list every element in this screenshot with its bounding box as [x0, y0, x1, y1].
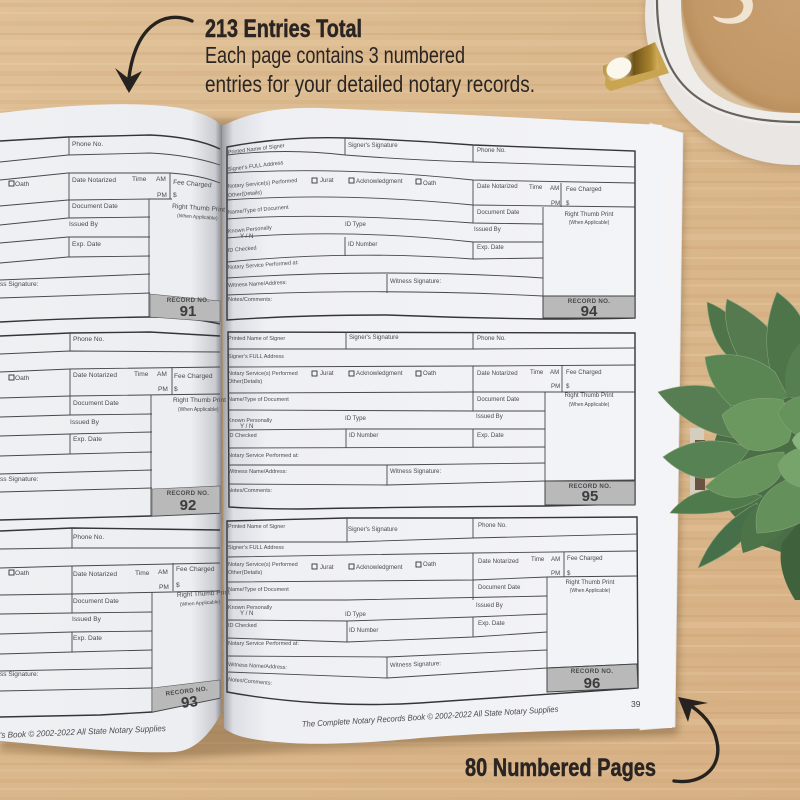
form: record 95: [228, 332, 635, 509]
form: record 93: $: [176, 582, 180, 589]
form: record 93: Right Thumb Print: [177, 589, 230, 599]
record number box 94: [543, 296, 635, 320]
form: record 96: Printed Name of Signer: [228, 524, 285, 530]
form: record 94: [227, 138, 635, 320]
form: record 92: Document Date: [73, 400, 119, 407]
form: record 94: Y / N: [240, 233, 253, 240]
form: record 96: Time: [531, 556, 545, 563]
form: record 92: Issued By: [70, 419, 100, 426]
form: record 93: Time: [135, 570, 150, 577]
form: record 95: Exp. Date: [477, 432, 504, 439]
form: record 94: Signer's FULL Address: [228, 160, 284, 173]
form: record 96: Witness Signature:: [390, 660, 441, 669]
form: record 95: ID Checked: [228, 433, 257, 439]
form: record 93: Phone No.: [73, 534, 104, 541]
form: record 92: PM: [158, 386, 168, 393]
form: record 95: Notary Service Performed at:: [228, 453, 299, 459]
form: record 95: Right Thumb Print: [564, 392, 614, 399]
form: record 94: Notary Service(s) Performed: [228, 178, 298, 190]
form: record 91: ss Signature:: [0, 281, 39, 288]
form: record 96: Notary Service Performed at:: [228, 641, 299, 647]
form: record 96: Other(Details): [228, 570, 262, 576]
form: record 91: PM: [157, 192, 167, 199]
record number box 94: 94: [581, 303, 598, 320]
record number box 96: [547, 664, 638, 692]
form: record 96: Exp. Date: [478, 620, 505, 627]
form: record 93: Oath: [15, 570, 30, 577]
form: record 94: Name/Type of Document: [228, 205, 289, 216]
text: entries description: [205, 42, 535, 97]
form: record 96: [227, 517, 638, 704]
form: record 91: Oath: [15, 181, 30, 188]
coffee cream swirl: [713, 0, 753, 24]
form: record 96: Notary Service(s) Performed: [228, 562, 298, 568]
form: record 91: Phone No.: [72, 141, 103, 148]
form: record 95: Known Personally: [228, 418, 272, 424]
succulent plant: [658, 292, 800, 600]
form: record 91: Exp. Date: [72, 241, 101, 248]
form: record 94: PM: [551, 200, 560, 207]
form: record 95: Phone No.: [477, 335, 506, 342]
form: record 94: ID Checked: [228, 246, 257, 254]
record number box 95: 95: [582, 488, 598, 505]
form: record 94: Witness Signature:: [390, 278, 441, 285]
form: record 91: Document Date: [72, 203, 118, 210]
right page: [222, 108, 672, 744]
form: record 92: Time: [134, 371, 149, 378]
left page footer: 's Book © 2002-2022 All State Notary Supplies: [0, 723, 167, 740]
arrow: pointing down to left page: [115, 17, 192, 93]
right page footer: The Complete Notary Records Book © 2002-2022 All State Notary Supplies: [302, 704, 559, 729]
form: record 94: Exp. Date: [477, 244, 504, 251]
text: entries description: entries for your detailed notary records.: [205, 71, 535, 97]
heading: 80 numbered pages: 80 Numbered Pages: [465, 754, 656, 782]
form: record 96: ID Type: [345, 611, 366, 618]
form: record 93: ss Signature:: [0, 671, 39, 678]
form: record 96: ID Checked: [228, 623, 257, 629]
form: record 94: Notes/Comments:: [228, 297, 272, 303]
record number box 91: RECORD NO.: [167, 297, 209, 304]
record number box 91: [150, 294, 220, 322]
plant pot: [690, 428, 705, 503]
form: record 94: Time: [529, 184, 543, 191]
form: record 91: $: [173, 192, 177, 199]
under page stack: [640, 123, 683, 730]
form: record 92: [0, 332, 226, 520]
form: record 95: Jurat: [320, 370, 334, 377]
form: record 95: Witness Name/Address:: [228, 469, 287, 475]
form: record 94: Date Notarized: [477, 183, 518, 190]
form: record 95: Y / N: [240, 423, 253, 430]
form: record 95: Time: [530, 369, 544, 376]
form: record 95: Printed Name of Signer: [228, 336, 285, 342]
form: record 92: ss Signature:: [0, 476, 39, 483]
form: record 91: Time: [132, 176, 147, 183]
record number box 96: 96: [584, 675, 600, 692]
left page: [0, 104, 222, 752]
form: record 96: Y / N: [240, 610, 253, 617]
form: record 95: (When Applicable): [569, 402, 610, 408]
form: record 95: Document Date: [477, 396, 520, 403]
form: record 92: $: [174, 386, 178, 393]
form: record 94: Notary Service Performed at:: [228, 260, 299, 271]
record number box 92: RECORD NO.: [167, 490, 209, 497]
page number: 39: [631, 699, 641, 709]
form: record 95: AM: [550, 369, 559, 376]
page stack shadow: [0, 115, 684, 760]
record number box 96: RECORD NO.: [571, 668, 613, 675]
form: record 92: AM: [157, 371, 167, 378]
form: record 95: ID Number: [349, 432, 378, 439]
form: record 96: Known Personally: [228, 605, 272, 611]
form: record 95: Fee Charged: [566, 369, 602, 376]
form: record 93: Date Notarized: [73, 571, 117, 578]
form: record 94: AM: [550, 185, 559, 192]
form: record 91: Date Notarized: [72, 177, 116, 184]
form: record 93: (When Applicable): [180, 599, 221, 608]
form: record 94: Witness Name/Address:: [228, 280, 287, 289]
form: record 95: $: [566, 383, 570, 390]
saucer and coffee cup: [645, 0, 800, 168]
form: record 91: Fee Charged: [173, 179, 212, 189]
form: record 96: Signer's FULL Address: [228, 545, 284, 551]
form: record 95: Acknowledgment: [356, 370, 403, 377]
form: record 95: Oath: [423, 370, 436, 377]
form: record 93: Fee Charged: [176, 566, 215, 573]
form: record 96: (When Applicable): [570, 588, 611, 594]
form: record 94: Known Personally: [228, 225, 272, 235]
form: record 96: Document Date: [478, 584, 521, 591]
form: record 95: Witness Signature:: [390, 468, 441, 475]
form: record 96: PM: [551, 570, 560, 577]
form: record 92: Exp. Date: [73, 436, 102, 443]
form: record 96: Signer's Signature: [348, 526, 398, 533]
form: record 91: [0, 135, 225, 324]
record number box 93: 93: [180, 693, 199, 712]
form: record 96: Fee Charged: [567, 555, 603, 562]
arrow: pointing up to page number: [674, 697, 718, 782]
record number box 93: [152, 680, 220, 712]
form: record 94: (When Applicable): [569, 220, 610, 226]
form: record 91: Right Thumb Print: [172, 203, 225, 214]
form: record 95: Notary Service(s) Performed: [228, 371, 298, 377]
heading: 213 entries total: 213 Entries Total: [205, 15, 362, 43]
form: record 94: Document Date: [477, 209, 520, 216]
form: record 92: Right Thumb Print: [173, 397, 226, 404]
form: record 95: ID Type: [345, 415, 366, 422]
form: record 95: Signer's Signature: [349, 334, 399, 341]
form: record 94: Acknowledgment: [356, 178, 403, 185]
text: entries description: Each page contains 3 numbered: [205, 42, 465, 68]
form: record 96: Acknowledgment: [356, 564, 403, 571]
form: record 93: PM: [159, 584, 169, 591]
form: record 92: (When Applicable): [178, 407, 219, 413]
form: record 93: Document Date: [73, 598, 119, 605]
form: record 94: Oath: [423, 180, 436, 187]
form: record 94: Signer's Signature: [348, 142, 398, 149]
form: record 93: Issued By: [72, 616, 102, 623]
form: record 92: Phone No.: [73, 336, 104, 343]
form: record 94: ID Number: [348, 241, 377, 248]
icon: gold cup handle: [603, 42, 669, 91]
form: record 95: Signer's FULL Address: [228, 354, 284, 360]
form: record 96: Oath: [423, 561, 436, 568]
form: record 93: [0, 528, 230, 717]
form: record 93: AM: [158, 569, 168, 576]
form: record 96: Phone No.: [478, 522, 507, 529]
record number box 95: RECORD NO.: [569, 483, 611, 490]
form: record 95: Other(Details): [228, 379, 262, 385]
form: record 96: AM: [551, 556, 560, 563]
form: record 95: Name/Type of Document: [228, 397, 289, 403]
form: record 93: Exp. Date: [73, 635, 102, 642]
form: record 91: AM: [156, 176, 166, 183]
form: record 94: ID Type: [345, 221, 366, 228]
form: record 96: Name/Type of Document: [228, 587, 289, 593]
record number box 91: 91: [180, 303, 196, 320]
form: record 95: Issued By: [476, 413, 504, 420]
form: record 95: Date Notarized: [477, 370, 518, 377]
form: record 94: Phone No.: [477, 147, 506, 154]
form: record 91: Issued By: [69, 221, 99, 228]
form: record 96: Right Thumb Print: [566, 579, 615, 586]
form: record 94: Jurat: [320, 177, 334, 184]
form: record 96: Jurat: [320, 564, 334, 571]
form: record 95: PM: [551, 383, 560, 390]
record number box 95: [545, 481, 635, 505]
form: record 92: Date Notarized: [73, 372, 117, 379]
form: record 94: Printed Name of Signer: [228, 143, 285, 156]
form: record 94: Issued By: [474, 226, 502, 233]
form: record 94: Right Thumb Print: [564, 211, 614, 218]
form: record 96: Date Notarized: [478, 558, 519, 565]
form: record 92: Fee Charged: [174, 373, 213, 380]
form: record 96: Notes/Comments:: [228, 677, 273, 687]
record number box 94: RECORD NO.: [568, 298, 610, 305]
form: record 94: Other(Details): [228, 190, 262, 199]
form: record 96: Witness Name/Address:: [228, 662, 288, 671]
form: record 96: Issued By: [476, 602, 504, 609]
form: record 94: $: [566, 200, 570, 207]
form: record 96: ID Number: [349, 627, 378, 634]
form: record 94: Fee Charged: [566, 186, 602, 193]
record number box 93: RECORD NO.: [165, 685, 208, 698]
form: record 95: Notes/Comments:: [228, 488, 272, 494]
form: record 92: Oath: [15, 375, 30, 382]
record number box 92: [152, 486, 220, 516]
form: record 96: $: [567, 570, 571, 577]
record number box 92: 92: [180, 497, 196, 514]
form: record 91: (When Applicable): [177, 213, 218, 222]
